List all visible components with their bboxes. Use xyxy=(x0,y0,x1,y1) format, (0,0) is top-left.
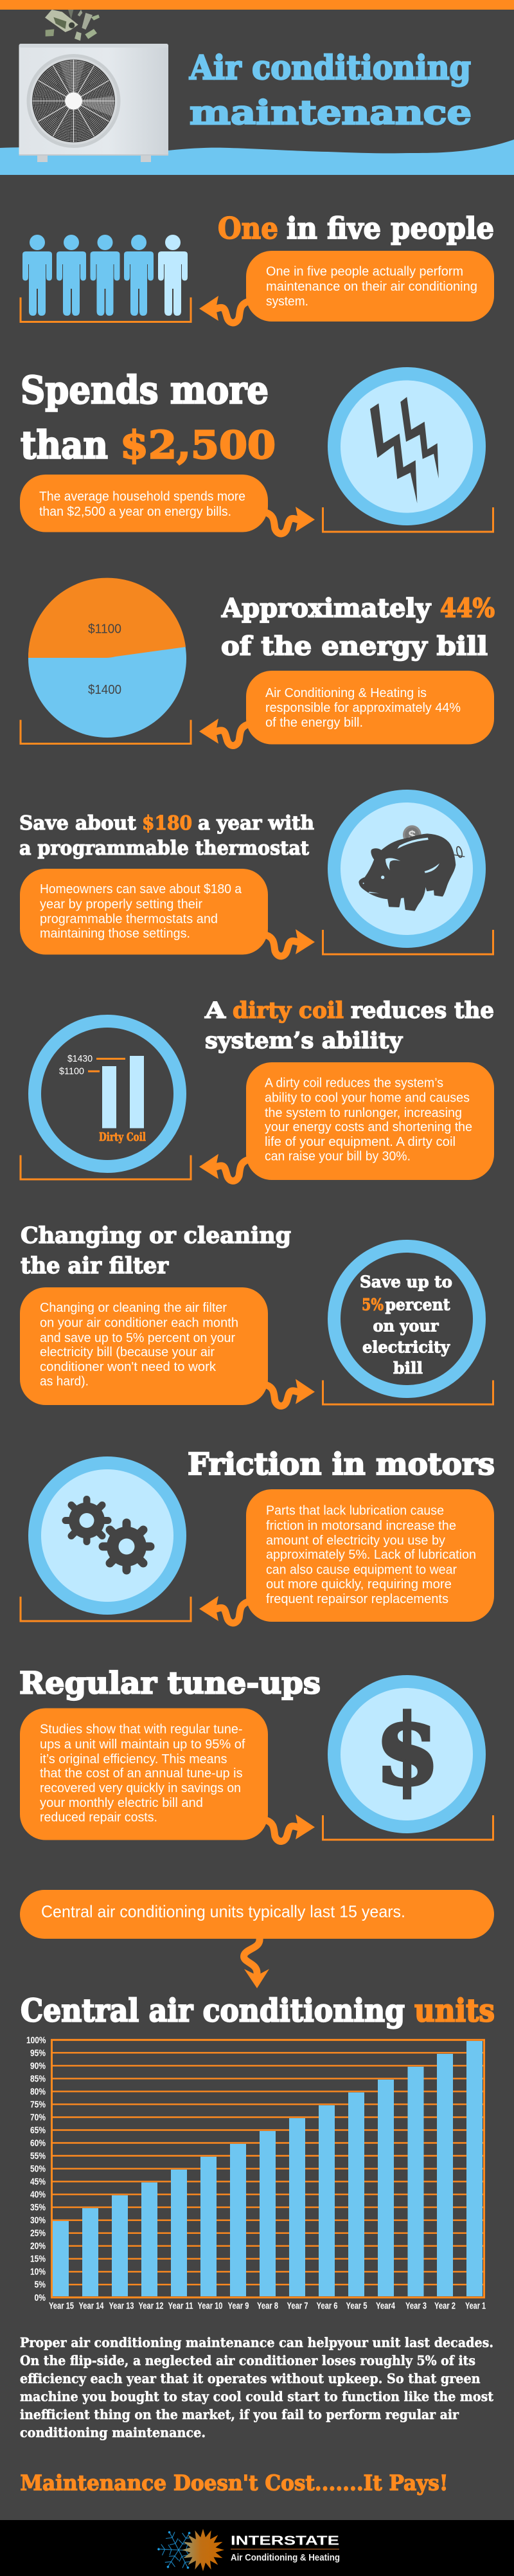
paragraph: proper maintenance: On the flip-side, a neglected air conditioner loses roughly 5% of its xyxy=(20,2353,475,2368)
callout: air conditioning and heating: Air Conditioning & Heating is xyxy=(265,686,427,700)
paragraph: proper maintenance xyxy=(20,2335,493,2440)
callout: air conditioning and heating xyxy=(246,671,494,745)
callout: tune-ups: ups a unit will maintain up to 95% of xyxy=(40,1737,245,1752)
pie chart xyxy=(28,578,186,738)
heading: save about $180: a year with xyxy=(198,812,314,835)
savings ring: bill xyxy=(393,1359,423,1377)
heading: a dirty coil: reduces the xyxy=(351,997,494,1024)
callout: friction: can also cause equipment to wear xyxy=(266,1563,457,1577)
bar chart: efficiency by year: Year 3 xyxy=(405,2301,427,2311)
callout: dirty coil xyxy=(246,1062,494,1180)
callout: tune-ups: Studies show that with regular tune- xyxy=(40,1722,243,1736)
bar chart: efficiency by year: Year 5 xyxy=(346,2301,368,2311)
bar chart: efficiency by year: 50% xyxy=(30,2163,46,2175)
bar chart: efficiency by year: 20% xyxy=(30,2240,46,2252)
bar chart: efficiency by year: 45% xyxy=(30,2176,46,2188)
heading: approximately 44%: Approximately xyxy=(221,593,432,624)
footer bar xyxy=(0,2520,514,2576)
heading: a dirty coil: system’s ability xyxy=(205,1028,403,1054)
bar chart: efficiency by year: Year 2 xyxy=(434,2301,456,2311)
callout: tune-ups: it’s original efficiency. This means xyxy=(40,1752,227,1766)
heading: a dirty coil: A xyxy=(204,997,226,1024)
savings ring xyxy=(334,1246,479,1392)
callout: central units last 15 years: Central air conditioning units typically last 15 years. xyxy=(41,1902,405,1921)
heading: save about $180 xyxy=(19,812,314,860)
callout: average household: The average household spends more xyxy=(39,490,245,504)
bar chart: efficiency by year: 70% xyxy=(30,2112,46,2123)
paragraph: proper maintenance: Proper air conditioning maintenance can helpyour unit last decades. xyxy=(20,2335,493,2350)
icon: gears circle xyxy=(28,1456,186,1615)
logo: wordmark xyxy=(231,2534,340,2563)
bar chart: efficiency by year: 85% xyxy=(30,2073,46,2085)
heading: regular tune-ups: Regular tune-ups xyxy=(19,1665,321,1701)
top orange bar xyxy=(0,0,514,10)
callout: friction: approximately 5%. Lack of lubrication xyxy=(266,1548,476,1562)
logo: wordmark: Air Conditioning & Heating xyxy=(231,2552,340,2563)
savings ring: 5% xyxy=(362,1295,384,1314)
heading: spends more than $2,500 xyxy=(21,368,276,467)
callout: air filter: Changing or cleaning the air filter xyxy=(40,1301,227,1315)
icon: piggy bank circle xyxy=(328,790,486,948)
heading: approximately 44%: 44% xyxy=(440,593,495,624)
arrow: to gears xyxy=(199,1596,248,1623)
callout: friction xyxy=(246,1489,494,1622)
heading: central air conditioning units: units xyxy=(414,1992,495,2029)
arrow: to savings circle xyxy=(266,1379,315,1406)
heading: changing the air filter xyxy=(21,1222,291,1279)
callout: dirty coil: ability to cool your home and causes xyxy=(265,1091,470,1105)
icon: dirty coil chart ring: $1100 xyxy=(59,1066,84,1076)
bracket under dollar circle xyxy=(323,1815,493,1840)
bar chart: efficiency by year: 95% xyxy=(30,2047,46,2059)
bar chart: efficiency by year: 55% xyxy=(30,2150,46,2162)
heading: friction in motors: Friction in motors xyxy=(188,1447,495,1482)
bracket under gears xyxy=(21,1597,191,1621)
bracket under people xyxy=(21,297,191,322)
icon: dollar circle: $ xyxy=(375,1694,439,1807)
heading: one in five people: One xyxy=(218,211,278,246)
paragraph: proper maintenance: efficiency each year that it operates without upkeep. So that green xyxy=(20,2371,481,2386)
heading: spends more than $2,500: $2,500 xyxy=(120,423,276,467)
blue wave band xyxy=(0,140,514,175)
heading: changing the air filter: Changing or cleaning xyxy=(21,1222,291,1249)
heading: save about $180: $180 xyxy=(142,812,192,835)
savings ring: percent xyxy=(386,1295,450,1314)
bar chart: efficiency by year xyxy=(26,2035,486,2311)
callout: one in five xyxy=(246,251,494,322)
savings ring: electricity xyxy=(362,1338,450,1357)
bar chart: efficiency by year: Year 1 xyxy=(465,2301,486,2311)
arrow: to dirty coil xyxy=(199,1154,248,1181)
bar chart: efficiency by year: 75% xyxy=(30,2099,46,2110)
heading: approximately 44% xyxy=(221,593,495,661)
callout: homeowners: maintaining those settings. xyxy=(40,927,190,941)
callout: homeowners xyxy=(20,869,268,954)
heading: save about $180: a programmable thermostat xyxy=(19,837,309,860)
callout: dirty coil: can raise your bill by 30%. xyxy=(265,1150,411,1164)
icon: dirty coil chart ring xyxy=(35,1021,180,1166)
bar chart: efficiency by year: 0% xyxy=(35,2292,46,2303)
heading: save about $180: Save about xyxy=(19,812,136,835)
callout: dirty coil: life of your equipment. A dirty coil xyxy=(265,1135,456,1149)
bar chart: efficiency by year: 65% xyxy=(30,2125,46,2136)
bar chart: efficiency by year: Year 11 xyxy=(168,2301,193,2311)
callout: tune-ups xyxy=(20,1708,268,1840)
bracket under lightning xyxy=(323,507,493,532)
pie chart: $1400 xyxy=(88,683,121,697)
bar chart: efficiency by year: Year4 xyxy=(376,2301,395,2311)
bar chart: efficiency by year: Year 7 xyxy=(287,2301,308,2311)
bracket under pie xyxy=(21,720,191,743)
tagline: Maintenance Doesn't Cost.......It Pays! xyxy=(21,2471,448,2495)
callout: one in five: One in five people actually perform xyxy=(266,265,463,279)
arrow: to piggy bank xyxy=(266,929,315,956)
callout: one in five: maintenance on their air conditioning xyxy=(266,280,477,294)
bracket under savings ring xyxy=(323,1380,493,1404)
arrow: down to chart xyxy=(244,1938,269,1988)
callout: one in five: system. xyxy=(266,295,308,309)
callout: air conditioning and heating: responsible for approximately 44% xyxy=(265,701,461,715)
paragraph: proper maintenance: inefficient thing on the market, if you fail to perform regular air xyxy=(20,2407,459,2422)
heading: central air conditioning units: Central air conditioning xyxy=(21,1992,405,2029)
bar chart: efficiency by year: 90% xyxy=(30,2060,46,2072)
callout: friction: friction in motorsand increase the xyxy=(266,1519,456,1533)
bar chart: efficiency by year: 30% xyxy=(30,2215,46,2226)
callout: homeowners: year by properly setting their xyxy=(40,898,202,912)
title xyxy=(189,49,472,132)
heading: one in five people: in five people xyxy=(287,211,494,246)
callout: average household xyxy=(20,475,268,532)
bar chart: efficiency by year: 10% xyxy=(30,2266,46,2278)
heading: a dirty coil: dirty coil xyxy=(233,997,344,1024)
bar chart: efficiency by year: 25% xyxy=(30,2227,46,2239)
callout: air filter: on your air conditioner each month xyxy=(40,1316,238,1330)
callout: friction: amount of electricity you use by xyxy=(266,1534,445,1548)
callout: homeowners: Homeowners can save about $180 a xyxy=(40,882,242,896)
arrow: to dollar circle xyxy=(266,1815,315,1842)
bar chart: efficiency by year: Year 10 xyxy=(198,2301,222,2311)
callout: average household: than $2,500 a year on energy bills. xyxy=(39,505,231,519)
heading: spends more than $2,500: than xyxy=(21,423,108,467)
callout: tune-ups: recovered very quickly in savings on xyxy=(40,1781,241,1795)
callout: air filter: and save up to 5% percent on your xyxy=(40,1331,235,1345)
icon: dirty coil chart ring: Dirty Coil xyxy=(99,1130,146,1144)
callout: tune-ups: reduced repair costs. xyxy=(40,1811,157,1825)
callout: dirty coil: A dirty coil reduces the system’s xyxy=(265,1076,443,1091)
bracket under piggy bank xyxy=(323,930,493,954)
bar chart: efficiency by year: Year 8 xyxy=(257,2301,278,2311)
logo: snowflake and sun xyxy=(156,2528,224,2571)
bar chart: efficiency by year: 100% xyxy=(26,2035,46,2046)
bar chart: efficiency by year: Year 12 xyxy=(139,2301,163,2311)
bar chart: efficiency by year: Year 6 xyxy=(316,2301,338,2311)
bar chart: efficiency by year: 35% xyxy=(30,2202,46,2213)
paragraph: proper maintenance: conditioning maintenance. xyxy=(20,2425,206,2440)
callout: homeowners: programmable thermostats and xyxy=(40,912,218,926)
heading: changing the air filter: the air filter xyxy=(21,1253,169,1279)
callout: dirty coil: your energy costs and shortening the xyxy=(265,1120,472,1134)
icon: flying money xyxy=(45,10,100,41)
pie chart: $1100 xyxy=(88,622,121,637)
arrow: to lightning xyxy=(266,507,315,534)
icon: five people xyxy=(22,235,188,316)
icon: air conditioner unit xyxy=(19,44,168,162)
bar chart: efficiency by year: 60% xyxy=(30,2137,46,2149)
callout: friction: frequent repairsor replacements xyxy=(266,1592,448,1606)
logo: wordmark: INTERSTATE xyxy=(231,2534,339,2548)
icon: dollar circle xyxy=(328,1675,486,1833)
callout: air filter: electricity bill (because your air xyxy=(40,1345,215,1359)
callout: air filter xyxy=(20,1287,268,1405)
savings ring: on your xyxy=(373,1317,439,1335)
savings ring: Save up to xyxy=(360,1273,452,1291)
callout: tune-ups: that the cost of an annual tune-up is xyxy=(40,1766,243,1781)
arrow: to pie xyxy=(199,719,248,746)
bracket under dirty coil xyxy=(21,1155,191,1179)
icon: dirty coil chart ring: $1430 xyxy=(67,1053,93,1064)
heading: a dirty coil xyxy=(204,997,494,1054)
callout: central units last 15 years xyxy=(20,1890,494,1939)
callout: dirty coil: the system to runlonger, increasing xyxy=(265,1106,462,1120)
arrow: to people xyxy=(199,296,248,323)
icon: lightning circle xyxy=(328,367,486,525)
callout: friction: out more quickly, requiring more xyxy=(266,1577,452,1592)
bar chart: efficiency by year: Year 15 xyxy=(49,2301,74,2311)
bar chart: efficiency by year: Year 13 xyxy=(109,2301,134,2311)
icon: piggy bank circle: $ xyxy=(409,828,416,843)
callout: air filter: as hard). xyxy=(40,1375,89,1389)
bar chart: efficiency by year: 15% xyxy=(30,2253,46,2265)
callout: air conditioning and heating: of the energy bill. xyxy=(265,716,363,730)
callout: friction: Parts that lack lubrication cause xyxy=(266,1503,444,1518)
title: Air conditioning xyxy=(189,49,471,87)
heading: approximately 44%: of the energy bill xyxy=(221,631,488,661)
bar chart: efficiency by year: 5% xyxy=(35,2279,46,2290)
title: maintenance xyxy=(190,94,472,132)
bar chart: efficiency by year: Year 9 xyxy=(227,2301,249,2311)
callout: air filter: conditioner won't need to work xyxy=(40,1360,217,1374)
bar chart: efficiency by year: Year 14 xyxy=(78,2301,104,2311)
callout: tune-ups: your monthly electric bill and xyxy=(40,1796,203,1810)
heading: spends more than $2,500: Spends more xyxy=(21,368,269,412)
bar chart: efficiency by year: 40% xyxy=(30,2189,46,2200)
bar chart: efficiency by year: 80% xyxy=(30,2086,46,2098)
